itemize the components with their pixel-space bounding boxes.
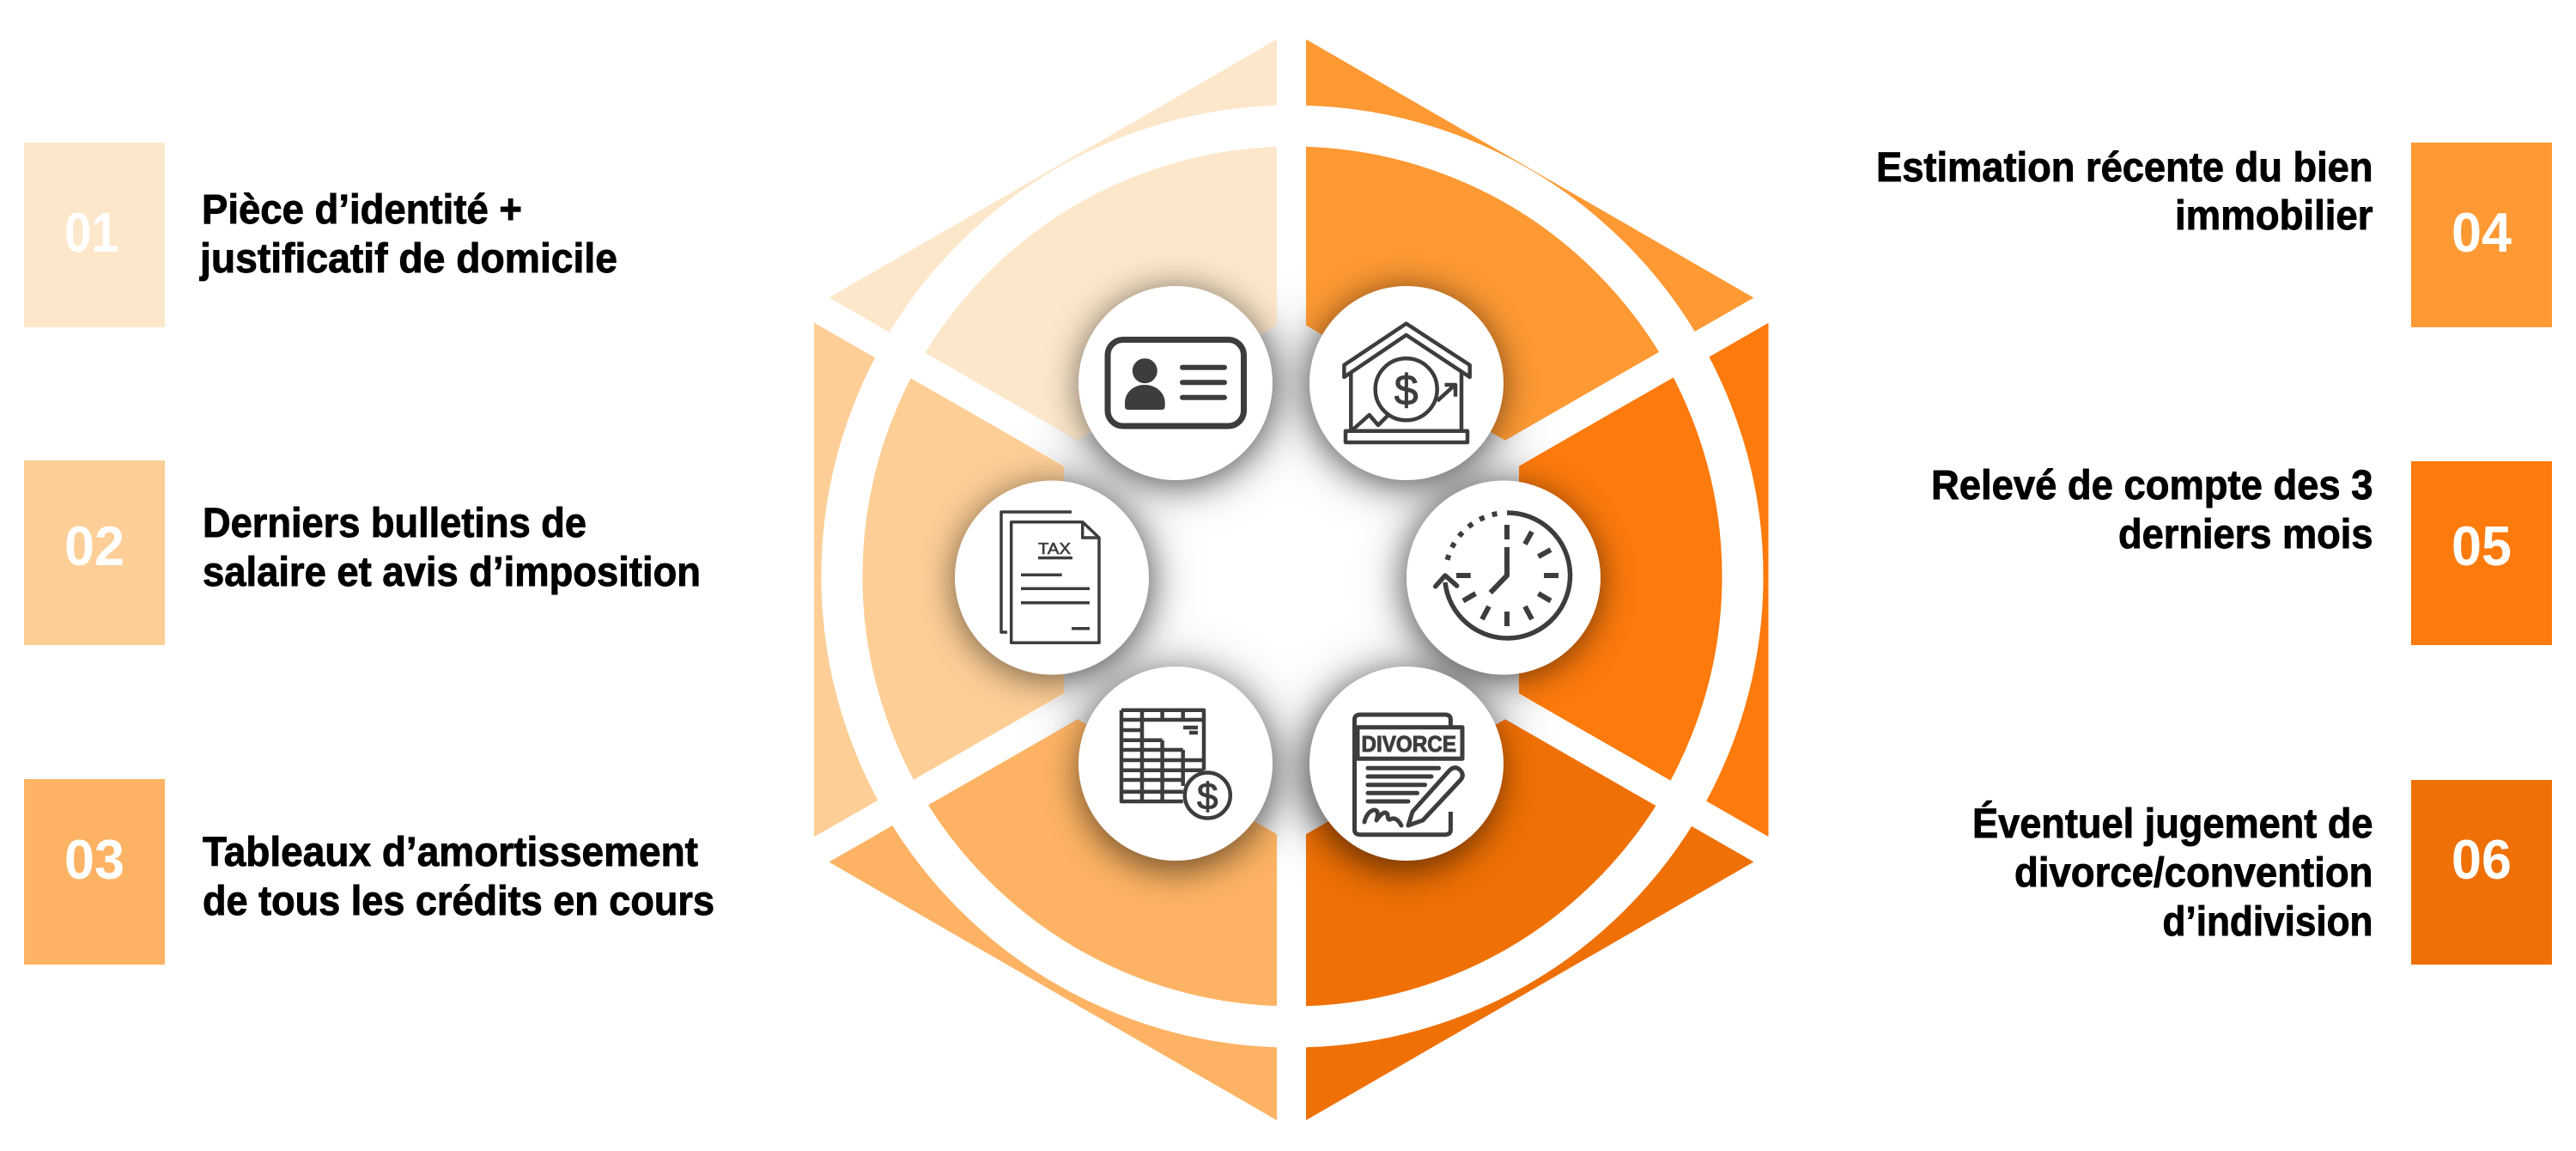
item 06	[1972, 780, 2552, 965]
item 02: salaire et avis d’imposition	[203, 550, 701, 595]
item 01: justificatif de domicile	[199, 236, 617, 282]
item 03	[24, 779, 714, 965]
item 06: d’indivision	[2162, 899, 2373, 945]
chart: segmented hexagon	[790, 17, 1793, 1142]
item 03: 03	[64, 828, 125, 891]
icon: identity card	[1078, 286, 1273, 480]
item 03: Tableaux d’amortissement	[203, 830, 698, 875]
panel: right items	[1876, 143, 2552, 965]
icon: divorce document with pen	[1309, 667, 1504, 861]
panel: left items	[24, 143, 714, 965]
item 02	[24, 460, 701, 645]
icon shadows	[952, 286, 1603, 873]
item 02: 02	[64, 515, 125, 577]
item 02: Derniers bulletins de	[203, 501, 586, 546]
item 01	[24, 143, 617, 327]
item 06: Éventuel jugement de	[1972, 801, 2373, 847]
item 06: 06	[2451, 828, 2512, 891]
item 04: immobilier	[2175, 193, 2373, 239]
icon: divorce document with pen: DIVORCE	[1362, 731, 1456, 757]
icon: tax documents	[955, 481, 1149, 675]
icon: house with dollar	[1309, 286, 1504, 480]
item 04	[1876, 143, 2552, 327]
item 04: Estimation récente du bien	[1876, 145, 2373, 191]
item 05: derniers mois	[2118, 512, 2373, 557]
icon: amortisation table with coin	[1078, 667, 1273, 861]
item 01: 01	[64, 201, 118, 264]
item 05	[1931, 461, 2552, 645]
item 06: divorce/convention	[2014, 850, 2373, 896]
item 05: Relevé de compte des 3	[1931, 463, 2373, 509]
item 04: 04	[2451, 201, 2512, 264]
icon: tax documents: TAX	[1038, 540, 1071, 557]
icon: amortisation table with coin: $	[1197, 776, 1218, 818]
item 05: 05	[2451, 515, 2512, 577]
item 01: Pièce d’identité +	[202, 187, 522, 233]
icon: clock with arrow	[1406, 481, 1601, 675]
item 03: de tous les crédits en cours	[203, 879, 714, 924]
icon: house with dollar: $	[1394, 366, 1419, 414]
